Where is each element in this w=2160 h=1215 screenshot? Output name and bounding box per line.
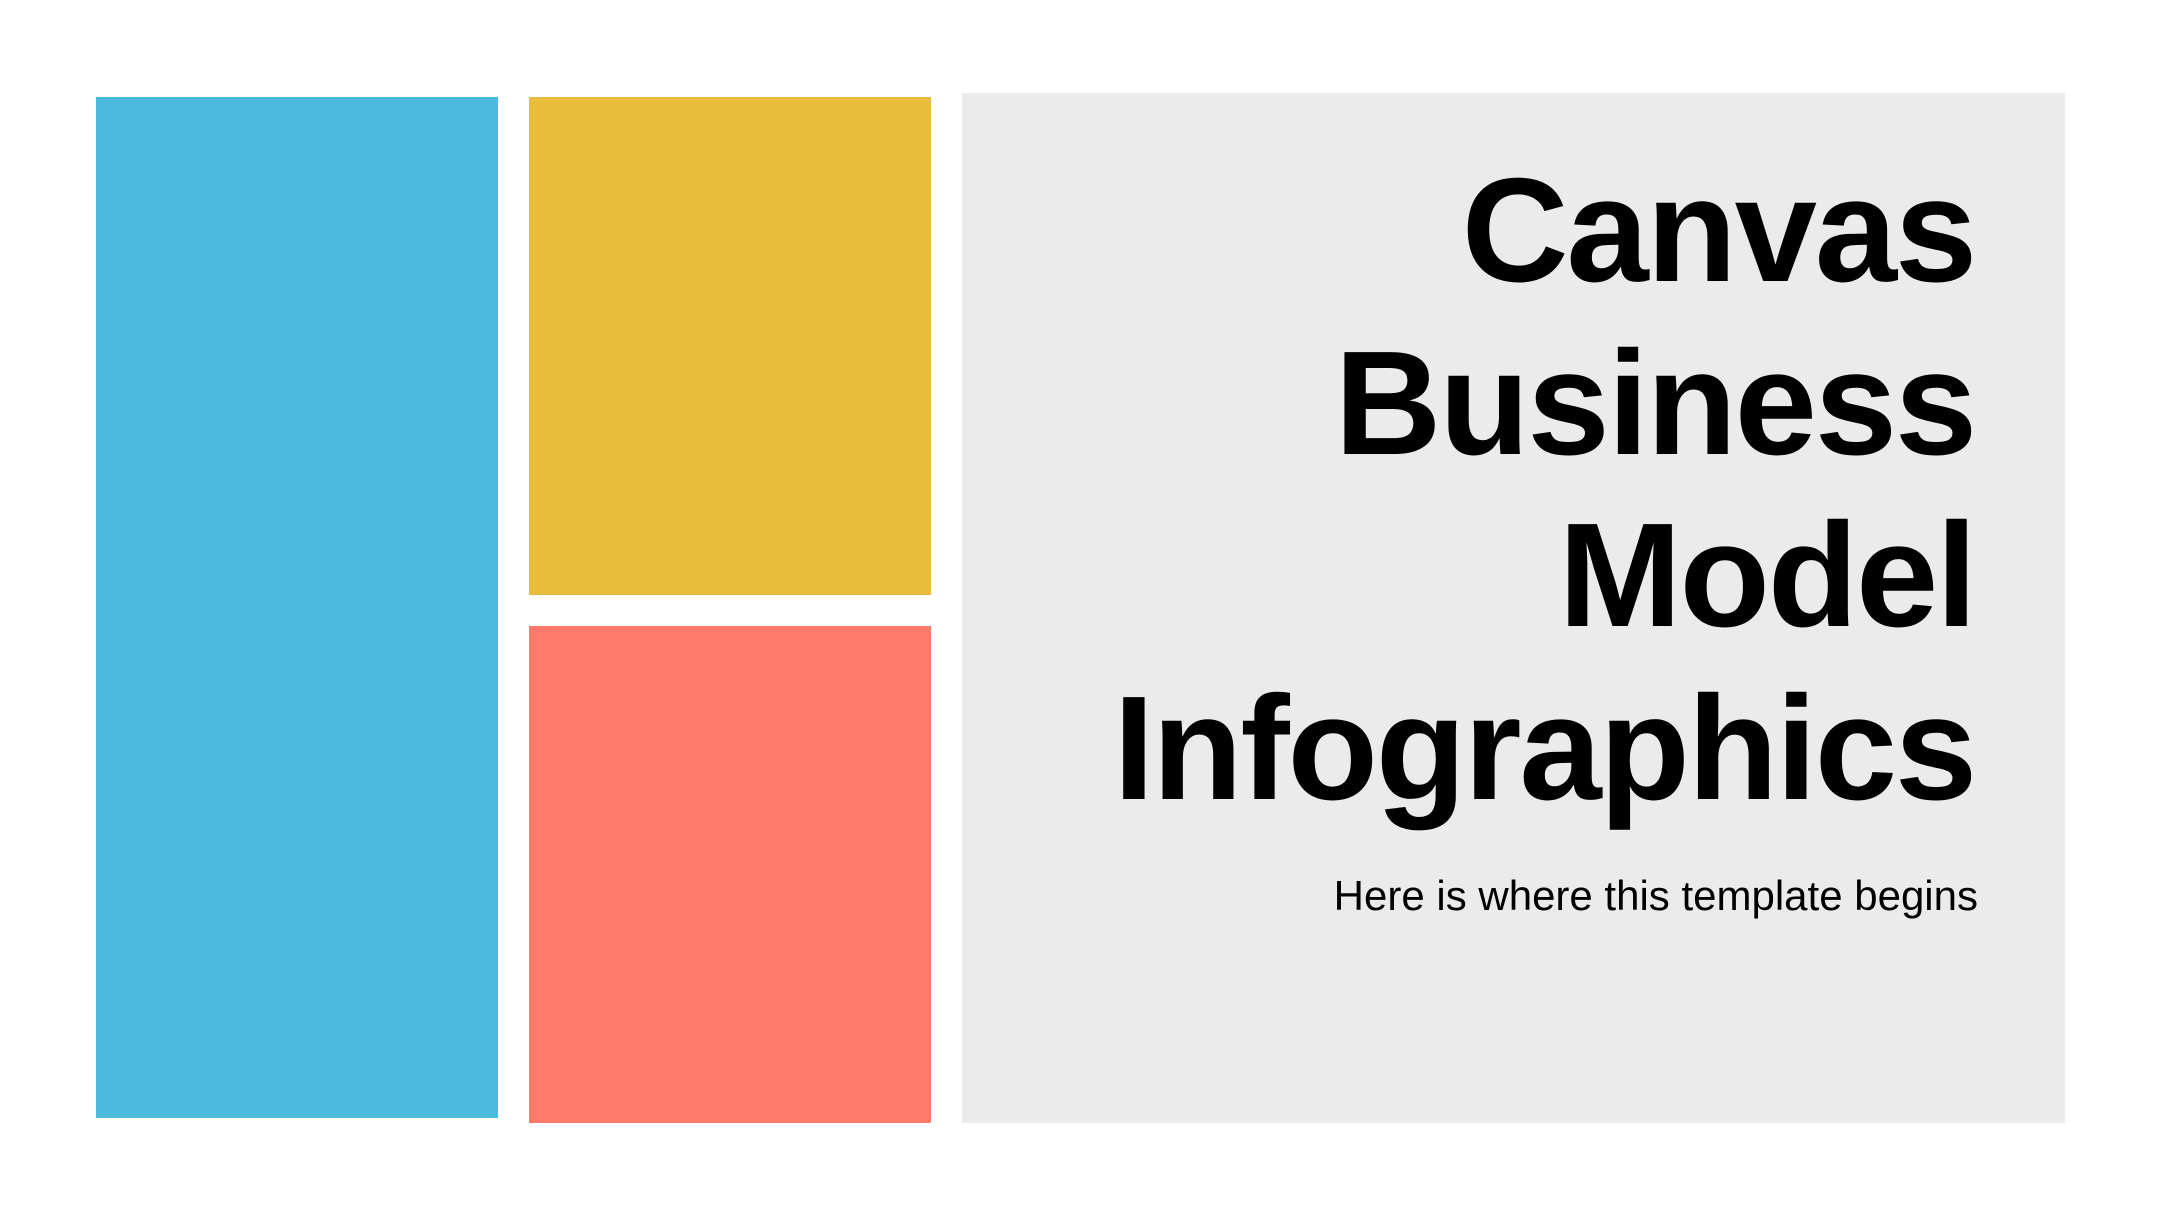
title: Model <box>1558 493 1975 658</box>
panel: grey title panel <box>962 93 2065 1123</box>
panel: red block <box>529 626 931 1123</box>
subtitle: Here is where this template begins <box>1334 872 1978 919</box>
title: Business <box>1335 321 1975 486</box>
title: Canvas <box>1462 148 1975 313</box>
title <box>1113 148 1975 831</box>
title: Infographics <box>1113 666 1975 831</box>
panel: blue block <box>96 97 498 1118</box>
panel: yellow block <box>529 97 931 595</box>
